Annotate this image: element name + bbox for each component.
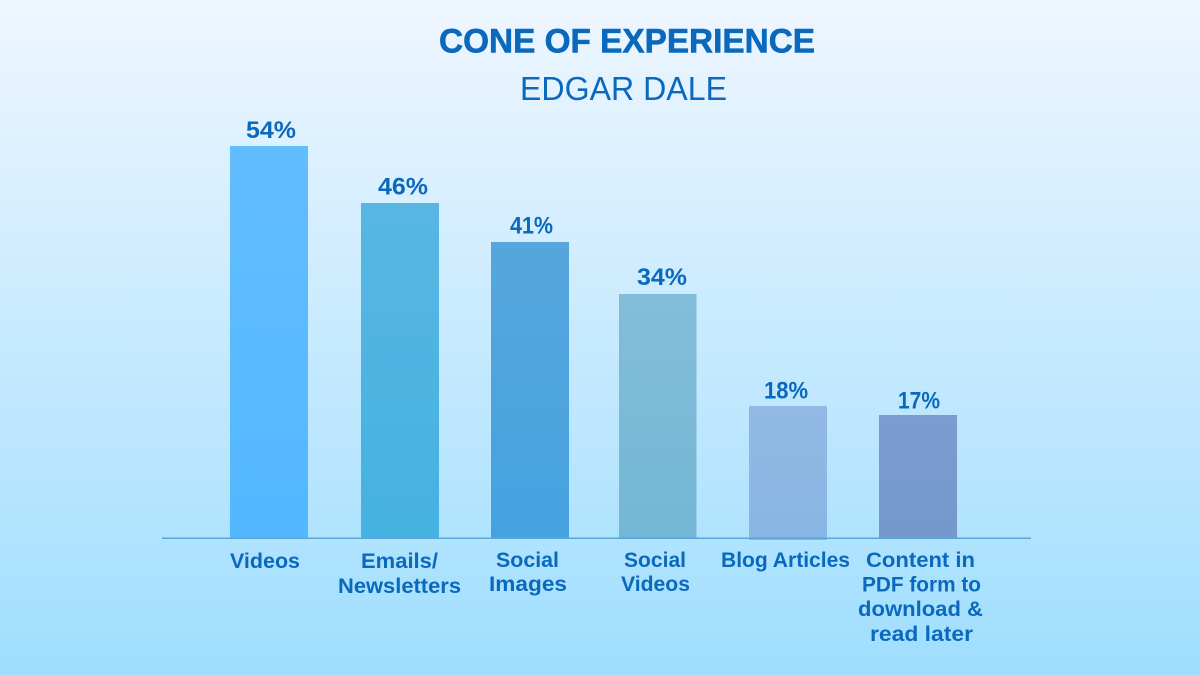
bar: Social Videos 34%: 34% [637, 264, 687, 291]
bar: Blog Articles 18%: 18% [764, 378, 808, 404]
bar: Social Images 41% [489, 212, 569, 596]
bar: Social Videos 34%: Videos [621, 573, 690, 596]
bar: Social Images 41%: 41% [510, 212, 553, 240]
bar: Content in PDF 17%: download & [858, 598, 983, 621]
bar: Content in PDF 17%: PDF form to [862, 574, 981, 596]
subtitle: EDGAR DALE [520, 71, 727, 108]
bar: Social Images 41%: Social [496, 549, 559, 572]
bar: Emails/Newsletters 46%: Newsletters [338, 575, 461, 598]
bar: Content in PDF 17%: read later [870, 623, 973, 646]
bar: Content in PDF 17%: 17% [898, 388, 940, 414]
bar: Emails/Newsletters 46%: 46% [378, 174, 428, 200]
bar: Emails/Newsletters 46%: Emails/ [361, 550, 438, 573]
axis line [162, 538, 1031, 539]
bar: Content in PDF 17%: Content in [866, 549, 975, 572]
bar: Blog Articles 18% [721, 378, 850, 572]
bar: Videos 54%: Videos [230, 550, 300, 573]
bar: Social Videos 34%: Social [624, 549, 686, 572]
title: CONE OF EXPERIENCE [439, 22, 815, 60]
bar: Blog Articles 18%: Blog Articles [721, 549, 850, 572]
bar: Videos 54%: 54% [246, 117, 296, 144]
bar: Social Images 41%: Images [489, 573, 567, 596]
bar: Social Videos 34% [619, 264, 696, 596]
bar chart [162, 117, 1031, 646]
bar: Content in PDF 17% [858, 388, 983, 646]
bar: Videos 54% [230, 117, 308, 573]
bar: Emails/Newsletters 46% [338, 174, 461, 598]
